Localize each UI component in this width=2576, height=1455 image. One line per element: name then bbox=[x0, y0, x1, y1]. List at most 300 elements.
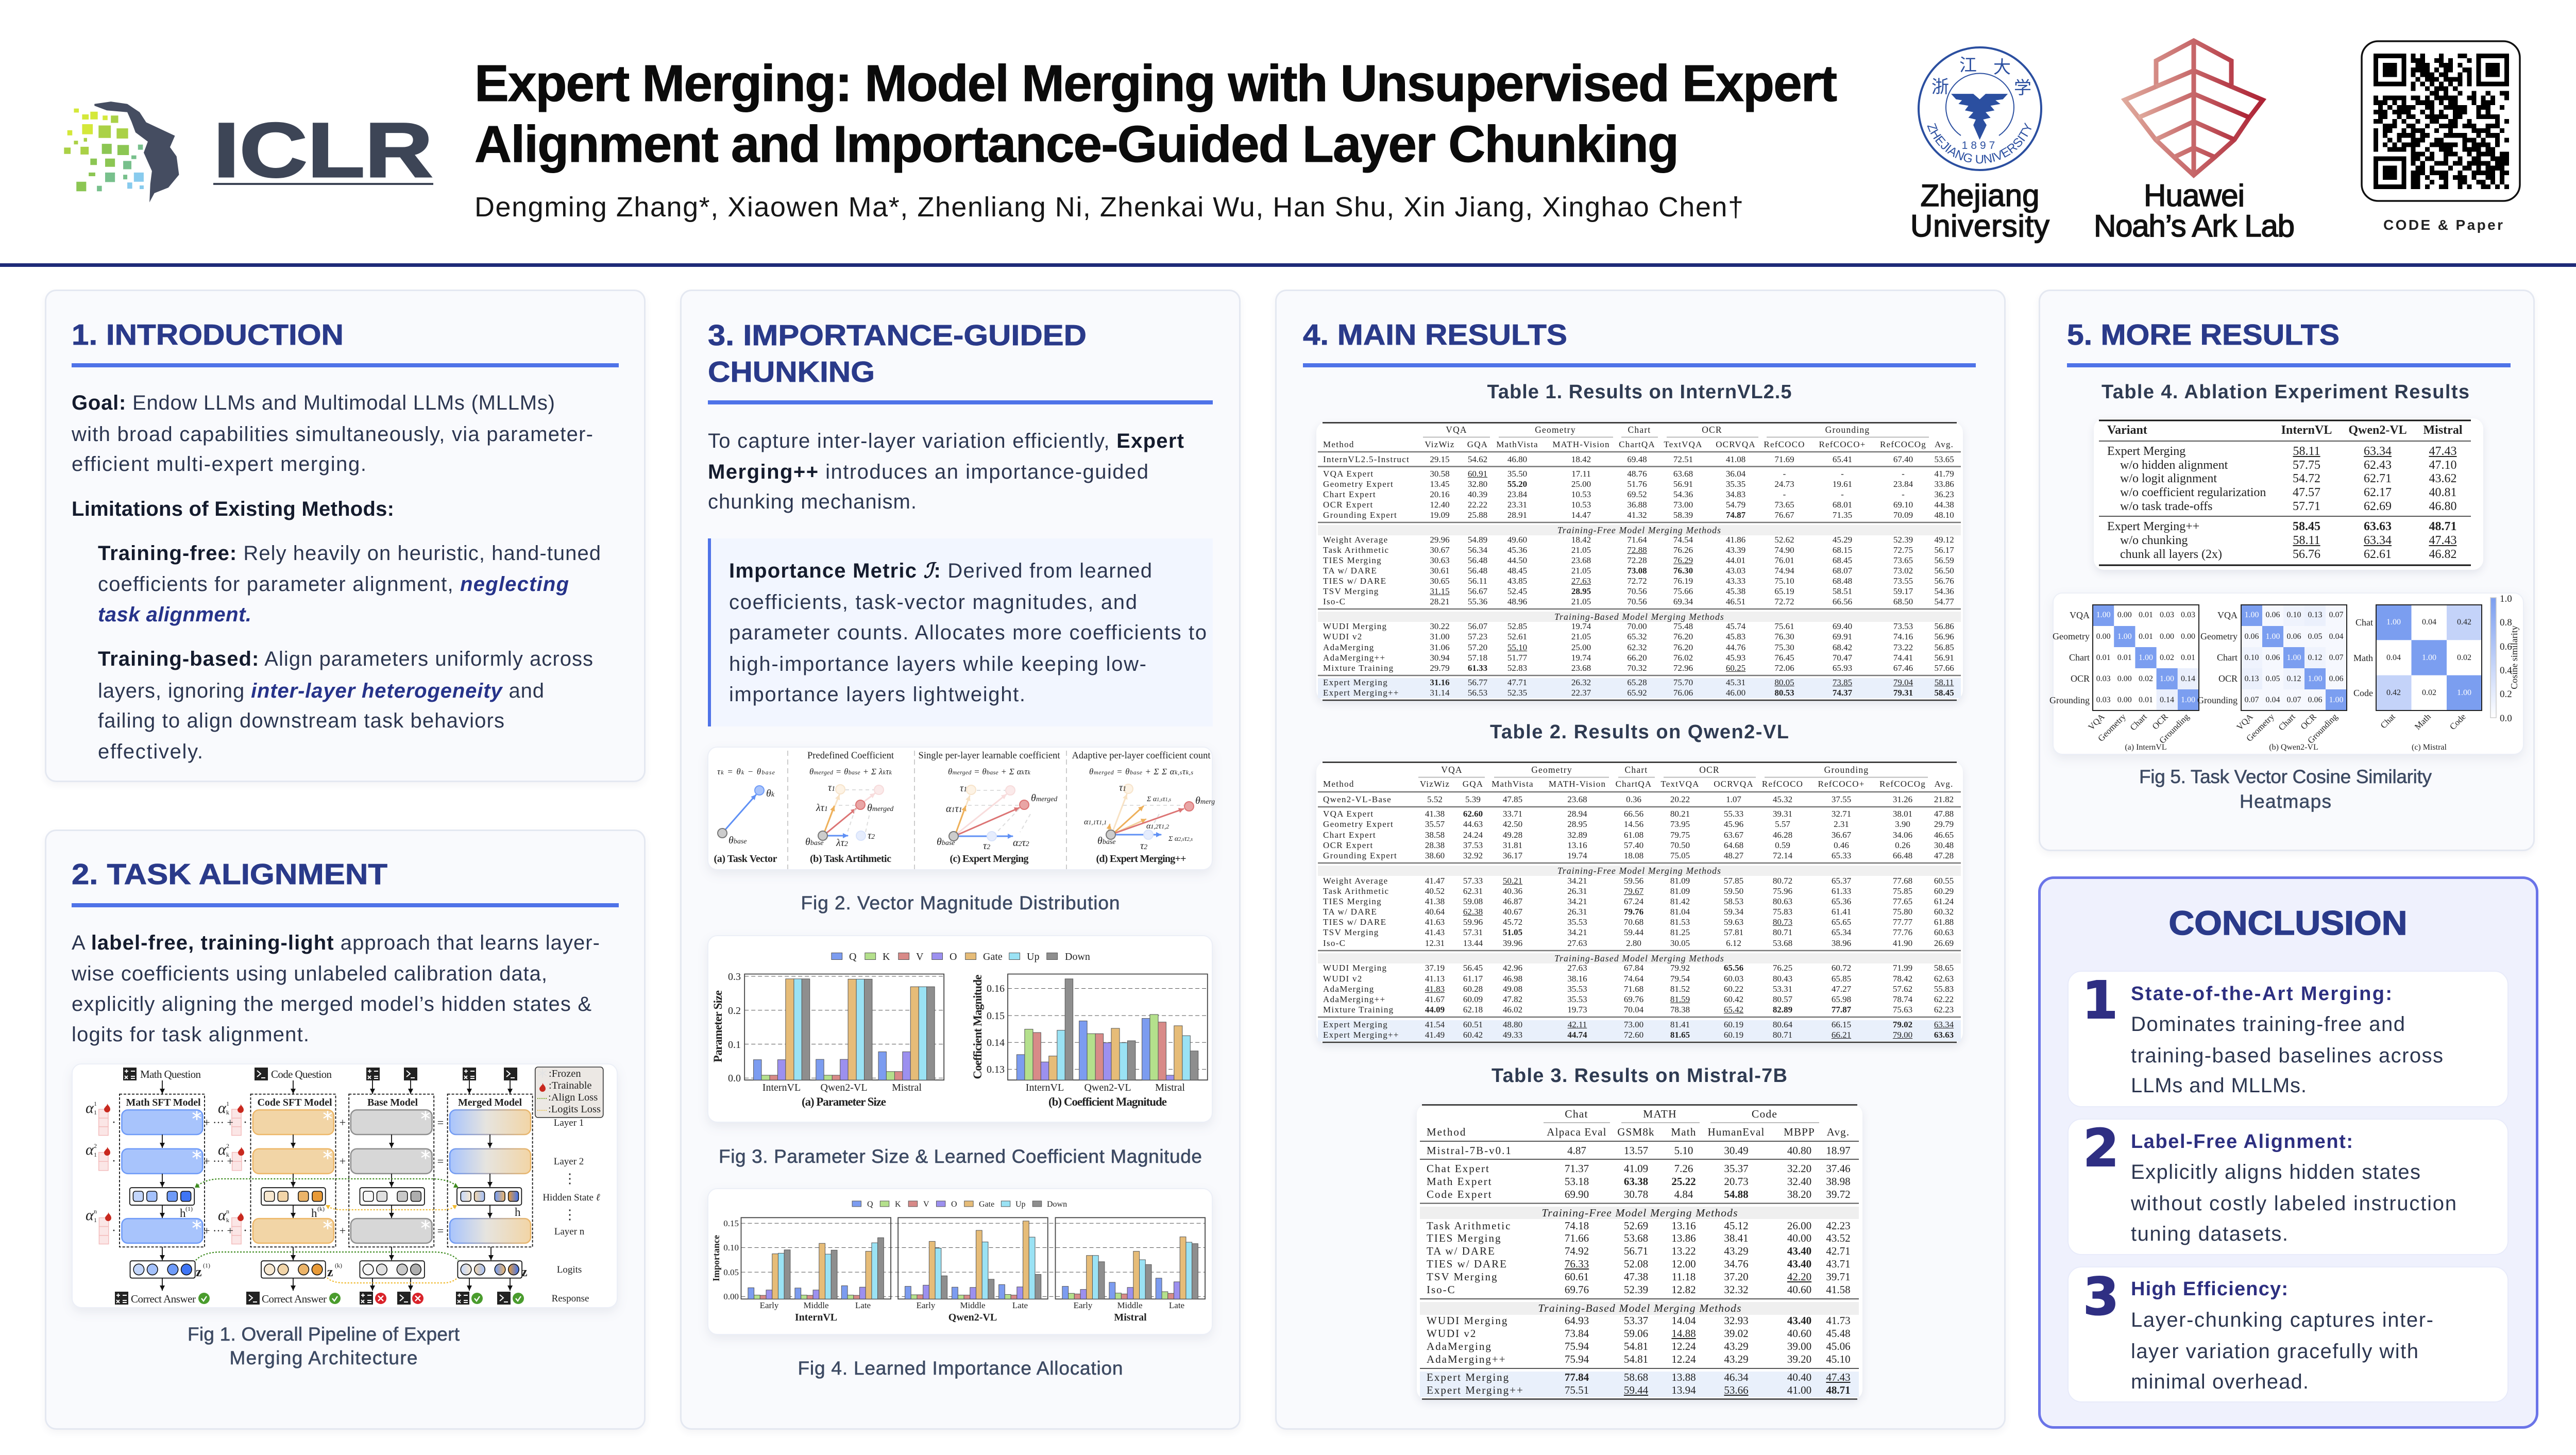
table 3: Mistral-7B results: HumanEval bbox=[1707, 1126, 1765, 1138]
table 3: Mistral-7B results: 54.88 bbox=[1724, 1188, 1749, 1200]
diagram labels: ⋮ bbox=[563, 1207, 577, 1222]
table 1: InternVL2.5 results: Chart bbox=[1628, 425, 1651, 435]
table 2: Qwen2-VL results: 36.67 bbox=[1832, 830, 1851, 840]
table 2: Qwen2-VL results: 80.73 bbox=[1773, 917, 1792, 927]
heading: 5. MORE RESULTS bbox=[2067, 318, 2511, 367]
figure 3: parameter size and coefficient magnitude charts: 0.14 bbox=[987, 1037, 1005, 1048]
heatmap: Qwen2-VL: VQA bbox=[2217, 610, 2238, 620]
label: Zhejiang University bbox=[1910, 178, 2049, 243]
table 2: Qwen2-VL results: Geometry Expert bbox=[1323, 819, 1394, 829]
table 3: Mistral-7B results: 32.93 bbox=[1724, 1314, 1749, 1327]
table 3: Mistral-7B results: 37.46 bbox=[1826, 1162, 1851, 1175]
table 2: Qwen2-VL results: 30.05 bbox=[1670, 938, 1690, 948]
table 2: Qwen2-VL results: Weight Average bbox=[1323, 876, 1388, 886]
table 1: InternVL2.5 results: 41.79 bbox=[1934, 469, 1954, 479]
conclusion card 1: 1 bbox=[2082, 970, 2118, 1030]
table 2: Qwen2-VL results: 81.52 bbox=[1670, 984, 1690, 994]
table 3: Mistral-7B results: 38.41 bbox=[1724, 1232, 1749, 1244]
table 1: InternVL2.5 results: 56.53 bbox=[1468, 688, 1487, 698]
table 2: Qwen2-VL results: 14.56 bbox=[1624, 819, 1643, 829]
heatmap: Qwen2-VL: 0.04 bbox=[2329, 632, 2343, 641]
table 2: Qwen2-VL results: 60.09 bbox=[1463, 994, 1483, 1004]
heatmap: Qwen2-VL: 0.06 bbox=[2286, 632, 2301, 641]
table 1: InternVL2.5 results: 49.60 bbox=[1507, 535, 1527, 545]
heatmap: InternVL: 0.00 bbox=[2160, 632, 2174, 641]
diagram labels: α bbox=[218, 1207, 227, 1224]
table 3: Mistral-7B results: 76.33 bbox=[1565, 1258, 1589, 1270]
heatmap: InternVL: 0.00 bbox=[2117, 696, 2132, 704]
table 2: Qwen2-VL results: 64.68 bbox=[1724, 840, 1743, 850]
table 1: InternVL2.5 results: 21.05 bbox=[1571, 597, 1591, 606]
table 2: Qwen2-VL results: Chart bbox=[1625, 765, 1648, 775]
table 2: Qwen2-VL results: 58.65 bbox=[1934, 963, 1954, 973]
table 2: Qwen2-VL results: 27.63 bbox=[1567, 963, 1587, 973]
text block: chunking intro bbox=[708, 430, 1184, 513]
diagram labels: = bbox=[437, 1155, 444, 1168]
table 1: InternVL2.5 results: 22.22 bbox=[1468, 500, 1487, 510]
table 3: Mistral-7B results: 43.71 bbox=[1826, 1258, 1851, 1270]
conclusion card 3: High Efficiency: bbox=[2131, 1278, 2288, 1300]
table 2: Qwen2-VL results: 34.21 bbox=[1567, 876, 1587, 886]
table 1: InternVL2.5 results: 14.47 bbox=[1571, 510, 1591, 520]
diagram labels: · bbox=[112, 1116, 116, 1129]
table 2: Qwen2-VL results: 47.28 bbox=[1934, 851, 1954, 860]
table 3: Mistral-7B results: 69.76 bbox=[1565, 1283, 1589, 1296]
table 1: InternVL2.5 results: 32.80 bbox=[1468, 479, 1487, 489]
figure 4: learned importance charts: Mistral bbox=[1114, 1312, 1147, 1323]
heatmap: Mistral: 0.02 bbox=[2457, 653, 2471, 662]
table 1: InternVL2.5 results: 25.88 bbox=[1468, 510, 1487, 520]
table 3: Mistral-7B results: 56.71 bbox=[1624, 1245, 1648, 1257]
conclusion card 2: Explicitly aligns hidden states bbox=[2131, 1161, 2420, 1183]
table 1: InternVL2.5 results: 58.51 bbox=[1833, 586, 1852, 596]
callout: importance metric: coefficients, task-vector magnitudes, and bbox=[729, 591, 1137, 614]
table 1: InternVL2.5 results: 19.74 bbox=[1571, 621, 1591, 631]
figure 3: parameter size and coefficient magnitude charts: 0.3 bbox=[728, 971, 741, 983]
table 1: InternVL2.5 results: 13.45 bbox=[1430, 479, 1450, 489]
heatmap: InternVL: Grounding bbox=[2157, 712, 2191, 746]
heatmap: InternVL: 0.00 bbox=[2181, 632, 2195, 641]
table 1: InternVL2.5 results: VQA Expert bbox=[1323, 469, 1374, 479]
table 4: ablation results: 62.43 bbox=[2364, 459, 2392, 472]
table 2: Qwen2-VL results: 69.76 bbox=[1624, 994, 1643, 1004]
table 2: Qwen2-VL results: 23.68 bbox=[1567, 794, 1587, 804]
figure 2: task vector diagrams: Adaptive per-layer coefficient count bbox=[1072, 751, 1211, 761]
table 1: InternVL2.5 results: 76.26 bbox=[1673, 545, 1693, 555]
table 4: ablation results: 57.71 bbox=[2293, 500, 2320, 513]
diagram labels: :Trainable bbox=[549, 1080, 592, 1091]
table 1: InternVL2.5 results: 54.36 bbox=[1673, 489, 1693, 499]
table 2: Qwen2-VL results: 3.90 bbox=[1895, 819, 1910, 829]
table 2: Qwen2-VL results: 81.41 bbox=[1670, 1020, 1690, 1029]
table 2: Qwen2-VL results: 80.64 bbox=[1773, 1020, 1792, 1029]
table 4: ablation results: Mistral bbox=[2424, 424, 2462, 437]
figure 4: learned importance charts: InternVL bbox=[795, 1312, 837, 1323]
heatmap: InternVL: VQA bbox=[2070, 610, 2090, 620]
table 1: InternVL2.5 results: 56.11 bbox=[1468, 576, 1487, 586]
figure 2: task vector diagrams: θmerged = θbase + Σ Σ αk,sτk,s bbox=[1089, 767, 1193, 776]
table 1: InternVL2.5 results: 45.38 bbox=[1726, 586, 1745, 596]
table 2: Qwen2-VL results: 81.42 bbox=[1670, 896, 1690, 906]
table 1: InternVL2.5 results: 73.65 bbox=[1774, 500, 1794, 510]
table 3: Mistral-7B results: 39.02 bbox=[1724, 1327, 1749, 1340]
text block: limitations heading: Limitations of Existing Methods: bbox=[72, 498, 394, 520]
figure 4: learned importance charts: Q bbox=[867, 1200, 873, 1209]
table 3: Mistral-7B results: TA w/ DARE bbox=[1427, 1245, 1496, 1257]
table 3: Mistral-7B results: Math bbox=[1671, 1126, 1697, 1138]
table 3: Mistral-7B results: 30.49 bbox=[1724, 1144, 1749, 1157]
table 3: Mistral-7B results: 45.10 bbox=[1826, 1353, 1851, 1365]
heatmap: Qwen2-VL: 0.12 bbox=[2308, 653, 2323, 662]
table 1: InternVL2.5 results: 74.54 bbox=[1673, 535, 1693, 545]
table 1: InternVL2.5 results: 67.40 bbox=[1893, 454, 1913, 464]
table 1: InternVL2.5 results: OCRVQA bbox=[1716, 439, 1756, 449]
table 2: Qwen2-VL results: 79.76 bbox=[1624, 907, 1643, 917]
table 1: InternVL2.5 results: 45.74 bbox=[1726, 621, 1745, 631]
table 1: InternVL2.5 results: 20.16 bbox=[1430, 489, 1450, 499]
heatmap: Mistral: 0.02 bbox=[2422, 688, 2436, 697]
table 3: Mistral-7B results: 63.38 bbox=[1624, 1175, 1648, 1188]
table 3: Mistral-7B results: 13.57 bbox=[1624, 1144, 1648, 1157]
table 1: InternVL2.5 results: 68.07 bbox=[1833, 566, 1852, 576]
table 1: InternVL2.5 results: 54.36 bbox=[1934, 586, 1954, 596]
table 1: InternVL2.5 results: 43.39 bbox=[1726, 545, 1745, 555]
table 2: Qwen2-VL results: 62.31 bbox=[1463, 886, 1483, 896]
table 2: Qwen2-VL results: 59.96 bbox=[1463, 917, 1483, 927]
table 3: Mistral-7B results: Code bbox=[1752, 1108, 1777, 1120]
figure 3: parameter size and coefficient magnitude charts: 0.1 bbox=[728, 1039, 741, 1051]
table 2: Qwen2-VL results: Training-Based Model Merging Methods bbox=[1554, 953, 1724, 963]
logo: Zhejiang University: 浙 bbox=[1931, 77, 1949, 97]
table 3: Mistral-7B results: 4.84 bbox=[1674, 1188, 1693, 1200]
table 2: Qwen2-VL results: 45.32 bbox=[1773, 794, 1792, 804]
table 1: InternVL2.5 results: MATH-Vision bbox=[1552, 439, 1610, 449]
table 2 title: Table 2. Results on Qwen2-VL bbox=[1490, 721, 1789, 743]
heatmap: Qwen2-VL: OCR bbox=[2218, 673, 2238, 684]
table 1: InternVL2.5 results: Grounding Expert bbox=[1323, 510, 1397, 520]
figure 3: parameter size and coefficient magnitude charts: 0.13 bbox=[987, 1064, 1005, 1075]
table 2: Qwen2-VL results: 34.21 bbox=[1567, 927, 1587, 937]
table 4: ablation results bbox=[2094, 418, 2483, 570]
table 2: Qwen2-VL results: 81.25 bbox=[1670, 927, 1690, 937]
table 1: InternVL2.5 results: 19.61 bbox=[1833, 479, 1852, 489]
heading: 4. MAIN RESULTS: 4. MAIN RESULTS bbox=[1303, 318, 1567, 351]
table 3: Mistral-7B results: 69.90 bbox=[1565, 1188, 1589, 1200]
table 4: ablation results: 62.71 bbox=[2364, 472, 2392, 485]
text block: training-free bbox=[98, 542, 601, 626]
table 2: Qwen2-VL results: 77.77 bbox=[1893, 917, 1912, 927]
table 1: InternVL2.5 results: WUDI Merging bbox=[1323, 621, 1387, 631]
figure 2: task vector diagrams: τk = θk − θbase bbox=[717, 767, 775, 776]
table 3: Mistral-7B results: 42.20 bbox=[1787, 1271, 1811, 1283]
caption: figure 1: Fig 1. Overall Pipeline of Expert bbox=[188, 1324, 460, 1345]
table 1: InternVL2.5 results: 72.72 bbox=[1627, 576, 1647, 586]
table 3: Mistral-7B results bbox=[1417, 1104, 1862, 1400]
heatmap: InternVL: 1.00 bbox=[2160, 674, 2174, 683]
table 1: InternVL2.5 results: 65.19 bbox=[1774, 586, 1794, 596]
table 1: InternVL2.5 results: 65.93 bbox=[1833, 663, 1852, 673]
heatmap: Qwen2-VL: 0.07 bbox=[2329, 611, 2343, 619]
table 2: Qwen2-VL results: 48.80 bbox=[1503, 1020, 1522, 1029]
table 2: Qwen2-VL results: 44.09 bbox=[1425, 1005, 1445, 1014]
QR caption: CODE & Paper bbox=[2383, 217, 2503, 233]
table 2: Qwen2-VL results: 45.96 bbox=[1724, 819, 1743, 829]
table 1: InternVL2.5 results: 45.93 bbox=[1726, 653, 1745, 663]
table 2: Qwen2-VL results: 37.19 bbox=[1425, 963, 1445, 973]
table 1: InternVL2.5 results: 52.61 bbox=[1507, 632, 1527, 641]
table 1: InternVL2.5 results: 75.10 bbox=[1774, 576, 1794, 586]
table 1: InternVL2.5 results: 45.83 bbox=[1726, 632, 1745, 641]
logo: Zhejiang University: 1897 bbox=[1962, 140, 1998, 151]
heatmap: Qwen2-VL: 1.00 bbox=[2244, 611, 2259, 619]
table 1: InternVL2.5 results: 68.45 bbox=[1833, 555, 1852, 565]
figure 3: parameter size and coefficient magnitude charts: Gate bbox=[983, 951, 1003, 962]
table 1: InternVL2.5 results: 29.15 bbox=[1430, 454, 1450, 464]
table 2: Qwen2-VL results: Grounding Expert bbox=[1323, 851, 1397, 860]
table 3: Mistral-7B results: 59.06 bbox=[1624, 1327, 1648, 1340]
table 2: Qwen2-VL results: 65.85 bbox=[1832, 974, 1851, 984]
table 1: InternVL2.5 results: 26.32 bbox=[1571, 678, 1591, 687]
table 1: InternVL2.5 results: 28.91 bbox=[1507, 510, 1527, 520]
table 2: Qwen2-VL results: 79.67 bbox=[1624, 886, 1643, 896]
text block: training-based: effectively. bbox=[98, 740, 203, 763]
table 2: Qwen2-VL results: 26.31 bbox=[1567, 907, 1587, 917]
table 3: Mistral-7B results: Expert Merging++ bbox=[1427, 1384, 1524, 1396]
table 3: Mistral-7B results: 46.34 bbox=[1724, 1371, 1749, 1383]
table 3: Mistral-7B results: 4.87 bbox=[1567, 1144, 1586, 1157]
table 2: Qwen2-VL results: 60.42 bbox=[1463, 1030, 1483, 1040]
table 3: Mistral-7B results: Math Expert bbox=[1427, 1175, 1493, 1188]
title: Expert Merging: Model Merging with Unsupervised Expert bbox=[474, 55, 1837, 112]
figure 4: learned importance charts: Late bbox=[1012, 1300, 1028, 1310]
table 3: Mistral-7B results: 52.69 bbox=[1624, 1220, 1648, 1232]
figure 2: task vector diagrams: θbase bbox=[805, 836, 823, 848]
table 1: InternVL2.5 results: 52.83 bbox=[1507, 663, 1527, 673]
text block: goal bbox=[71, 392, 593, 476]
figure 3: parameter size and coefficient magnitude charts: 0.15 bbox=[987, 1010, 1005, 1022]
table 1: InternVL2.5 results: 56.77 bbox=[1468, 678, 1487, 687]
table 1: InternVL2.5 results: Grounding bbox=[1825, 425, 1870, 435]
table 1: InternVL2.5 results: - bbox=[1902, 489, 1905, 499]
table 3: Mistral-7B results: 75.94 bbox=[1565, 1340, 1589, 1352]
table 2: Qwen2-VL results: 31.81 bbox=[1503, 840, 1522, 850]
colorbar: 0.6 bbox=[2500, 641, 2512, 652]
table 2: Qwen2-VL results: 41.13 bbox=[1425, 974, 1445, 984]
diagram labels: Correct Answer bbox=[131, 1293, 196, 1305]
heading: CONCLUSION: CONCLUSION bbox=[2169, 904, 2407, 942]
table 1: InternVL2.5 results: 74.90 bbox=[1774, 545, 1794, 555]
figure 3: parameter size and coefficient magnitude charts: 0.16 bbox=[987, 983, 1005, 994]
table 1: InternVL2.5 results: 46.80 bbox=[1507, 454, 1527, 464]
table 3: Mistral-7B results: 14.04 bbox=[1671, 1314, 1696, 1327]
table 2: Qwen2-VL results: 12.31 bbox=[1425, 938, 1445, 948]
diagram labels: + bbox=[340, 1116, 346, 1129]
diagram labels: α bbox=[86, 1207, 94, 1224]
figure 4: learned importance charts: Down bbox=[1047, 1200, 1067, 1209]
table 1: InternVL2.5 results: 48.10 bbox=[1934, 510, 1954, 520]
table 4: ablation results: 47.10 bbox=[2429, 459, 2456, 472]
table 3: Mistral-7B results: 43.29 bbox=[1724, 1353, 1749, 1365]
table 2: Qwen2-VL results: 63.63 bbox=[1934, 1030, 1954, 1040]
table 1: InternVL2.5 results: Mixture Training bbox=[1323, 663, 1394, 673]
table 1: InternVL2.5 results: 52.45 bbox=[1507, 586, 1527, 596]
diagram labels: 1 bbox=[94, 1216, 97, 1224]
table 1: InternVL2.5 results: RefCOCO bbox=[1764, 439, 1805, 449]
heatmap: InternVL: 0.01 bbox=[2096, 653, 2111, 662]
table 2: Qwen2-VL results: TSV Merging bbox=[1323, 927, 1379, 937]
table 1: InternVL2.5 results: 74.87 bbox=[1726, 510, 1745, 520]
figure 4: learned importance charts: Late bbox=[855, 1300, 871, 1310]
table 3: Mistral-7B results: 38.98 bbox=[1826, 1175, 1851, 1188]
table 1: InternVL2.5 results: TA w/ DARE bbox=[1323, 566, 1377, 576]
table 1: InternVL2.5 results: 70.32 bbox=[1627, 663, 1647, 673]
diagram labels: Layer 2 bbox=[554, 1156, 584, 1167]
heatmap: Qwen2-VL: Chart bbox=[2217, 652, 2238, 663]
table 2: Qwen2-VL results: 66.21 bbox=[1832, 1030, 1851, 1040]
figure 2: task vector diagrams: α1,1τ1,1 bbox=[1084, 818, 1107, 826]
table 3: Mistral-7B results: 7.26 bbox=[1674, 1162, 1693, 1175]
table 2: Qwen2-VL results: Iso-C bbox=[1323, 938, 1346, 948]
table 1: InternVL2.5 results: 53.65 bbox=[1934, 454, 1954, 464]
table 1: InternVL2.5 results: 30.61 bbox=[1430, 566, 1450, 576]
table 1: InternVL2.5 results: 56.76 bbox=[1934, 576, 1954, 586]
table 1: InternVL2.5 results: 76.20 bbox=[1673, 642, 1693, 652]
figure 4: learned importance charts: Early bbox=[1074, 1300, 1093, 1310]
text block: training-based bbox=[98, 648, 593, 763]
figure 3: parameter size and coefficient magnitude charts: Mistral bbox=[892, 1082, 922, 1093]
table 1: InternVL2.5 results: VizWiz bbox=[1425, 439, 1455, 449]
diagram labels: :Logits Loss bbox=[548, 1104, 601, 1115]
table 2: Qwen2-VL results: TA w/ DARE bbox=[1323, 907, 1377, 917]
figure 4: learned importance charts: O bbox=[951, 1200, 957, 1209]
figure 2: task vector diagrams: (d) Expert Merging++ bbox=[1096, 853, 1186, 865]
callout: importance metric bbox=[708, 538, 1213, 726]
table 2: Qwen2-VL results: 1.07 bbox=[1726, 794, 1741, 804]
table 3: Mistral-7B results: 30.78 bbox=[1624, 1188, 1648, 1200]
label: Zhejiang University: University bbox=[1910, 209, 2049, 243]
table 1: InternVL2.5 results: 36.04 bbox=[1726, 469, 1745, 479]
table 2: Qwen2-VL results: 71.68 bbox=[1624, 984, 1643, 994]
table 1: InternVL2.5 results: 65.41 bbox=[1833, 454, 1852, 464]
heatmap: Qwen2-VL: 0.13 bbox=[2244, 674, 2259, 683]
table 1: InternVL2.5 results: 68.48 bbox=[1833, 576, 1852, 586]
heatmap: Qwen2-VL: OCR bbox=[2299, 712, 2318, 732]
table 1: InternVL2.5 results: 68.42 bbox=[1833, 642, 1852, 652]
diagram labels: α bbox=[86, 1141, 94, 1158]
table 2: Qwen2-VL results: OCRVQA bbox=[1714, 779, 1754, 789]
table 3: Mistral-7B results: 64.93 bbox=[1565, 1314, 1589, 1327]
table 2: Qwen2-VL results: 39.31 bbox=[1773, 809, 1792, 819]
table 1: InternVL2.5 results: 59.17 bbox=[1893, 586, 1913, 596]
diagram labels: Merged Model bbox=[458, 1097, 522, 1108]
heatmap: Mistral: Code bbox=[2448, 712, 2468, 732]
diagram labels: k bbox=[226, 1109, 229, 1116]
table 2: Qwen2-VL results: 60.28 bbox=[1463, 984, 1483, 994]
table 3: Mistral-7B results: 43.52 bbox=[1826, 1232, 1851, 1244]
diagram labels: z bbox=[196, 1264, 202, 1279]
table 1: InternVL2.5 results: 12.40 bbox=[1430, 500, 1450, 510]
table 3: Mistral-7B results: 12.82 bbox=[1671, 1283, 1696, 1296]
table 1: InternVL2.5 results: OCR Expert bbox=[1323, 500, 1374, 510]
table 2: Qwen2-VL results: 51.05 bbox=[1503, 927, 1522, 937]
heatmap: InternVL: 0.14 bbox=[2181, 674, 2195, 683]
diagram labels: · bbox=[112, 1224, 116, 1238]
table 3: Mistral-7B results: Avg. bbox=[1827, 1126, 1850, 1138]
diagram labels: + ··· + bbox=[204, 1224, 233, 1237]
table 1: InternVL2.5 results: - bbox=[1783, 469, 1786, 479]
label: Zhejiang University: Zhejiang bbox=[1921, 178, 2039, 213]
table 2: Qwen2-VL results: 65.98 bbox=[1832, 994, 1851, 1004]
figure 2: task vector diagrams: θbase bbox=[728, 835, 747, 846]
table 4: ablation results: 58.11 bbox=[2293, 445, 2320, 458]
diagram labels: z bbox=[521, 1264, 528, 1279]
diagram labels: α bbox=[218, 1141, 227, 1158]
table 4: ablation results: Expert Merging++ bbox=[2107, 520, 2199, 533]
table 1: InternVL2.5 results: 73.02 bbox=[1893, 566, 1913, 576]
figure 2: task vector diagrams: (c) Expert Merging bbox=[950, 853, 1028, 865]
table 1: InternVL2.5 results: 72.75 bbox=[1893, 545, 1913, 555]
heatmap: Qwen2-VL: Geometry bbox=[2200, 631, 2238, 641]
table 2: Qwen2-VL results: 65.33 bbox=[1832, 851, 1851, 860]
table 2: Qwen2-VL results: 57.40 bbox=[1624, 840, 1643, 850]
table 1: InternVL2.5 results: 57.20 bbox=[1468, 642, 1487, 652]
table 2: Qwen2-VL results: 62.23 bbox=[1934, 1005, 1954, 1014]
table 1: InternVL2.5 results: 40.39 bbox=[1468, 489, 1487, 499]
table 1: InternVL2.5 results: TextVQA bbox=[1664, 439, 1703, 449]
panel: 3. Importance-Guided Chunking bbox=[680, 290, 1241, 1430]
table 1: InternVL2.5 results: 73.08 bbox=[1627, 566, 1647, 576]
table 2: Qwen2-VL results: 46.87 bbox=[1503, 896, 1522, 906]
table 2: Qwen2-VL results: 79.75 bbox=[1670, 830, 1690, 840]
diagram labels: Code Question bbox=[271, 1068, 332, 1080]
figure 3: parameter size and coefficient magnitude charts: InternVL bbox=[762, 1082, 801, 1093]
heatmap: InternVL: 0.02 bbox=[2139, 674, 2153, 683]
table 3: Mistral-7B results: 37.20 bbox=[1724, 1271, 1749, 1283]
figure 3: parameter size and coefficient magnitude charts bbox=[708, 936, 1212, 1122]
heatmap: InternVL: VQA bbox=[2086, 712, 2107, 732]
colorbar: Cosine similarity bbox=[2509, 625, 2519, 689]
table 1: InternVL2.5 results: 57.66 bbox=[1934, 663, 1954, 673]
table 1: InternVL2.5 results: 75.70 bbox=[1673, 678, 1693, 687]
table 1: InternVL2.5 results: TIES Merging bbox=[1323, 555, 1382, 565]
heatmap: Mistral: 1.00 bbox=[2422, 653, 2436, 662]
table 2: Qwen2-VL results: 61.41 bbox=[1832, 907, 1851, 917]
heatmap: Qwen2-VL: 0.10 bbox=[2286, 611, 2301, 619]
diagram labels: h bbox=[311, 1207, 317, 1220]
heatmap: InternVL: (a) InternVL bbox=[2125, 743, 2167, 752]
table 1: InternVL2.5 results: 76.29 bbox=[1673, 555, 1693, 565]
table 2: Qwen2-VL results: 34.06 bbox=[1893, 830, 1912, 840]
caption: figure 5: Fig 5. Task Vector Cosine Similarity bbox=[2139, 766, 2432, 787]
header divider bbox=[0, 263, 2576, 267]
heatmap: Mistral: 0.04 bbox=[2422, 618, 2436, 627]
table 2: Qwen2-VL results: 45.72 bbox=[1503, 917, 1522, 927]
colorbar: 1.0 bbox=[2500, 594, 2512, 604]
table 2: Qwen2-VL results: 39.96 bbox=[1503, 938, 1522, 948]
table 2: Qwen2-VL results: 79.54 bbox=[1670, 974, 1690, 984]
heatmap: Mistral bbox=[2353, 605, 2482, 752]
table 3: Mistral-7B results: GSM8k bbox=[1617, 1126, 1655, 1138]
table 3: Mistral-7B results: 40.60 bbox=[1787, 1327, 1811, 1340]
table 2: Qwen2-VL results: 42.96 bbox=[1503, 963, 1522, 973]
conclusion card 1: training-based baselines across bbox=[2131, 1044, 2443, 1067]
table 2: Qwen2-VL results: 80.21 bbox=[1670, 809, 1690, 819]
table 1: InternVL2.5 results: 58.11 bbox=[1935, 678, 1954, 687]
figure 2: task vector diagrams: α1,2τ1,2 bbox=[1146, 822, 1169, 831]
table 1: InternVL2.5 results: Weight Average bbox=[1323, 535, 1388, 545]
table 2: Qwen2-VL results: 78.38 bbox=[1670, 1005, 1690, 1014]
table 1: InternVL2.5 results: 36.23 bbox=[1934, 489, 1954, 499]
